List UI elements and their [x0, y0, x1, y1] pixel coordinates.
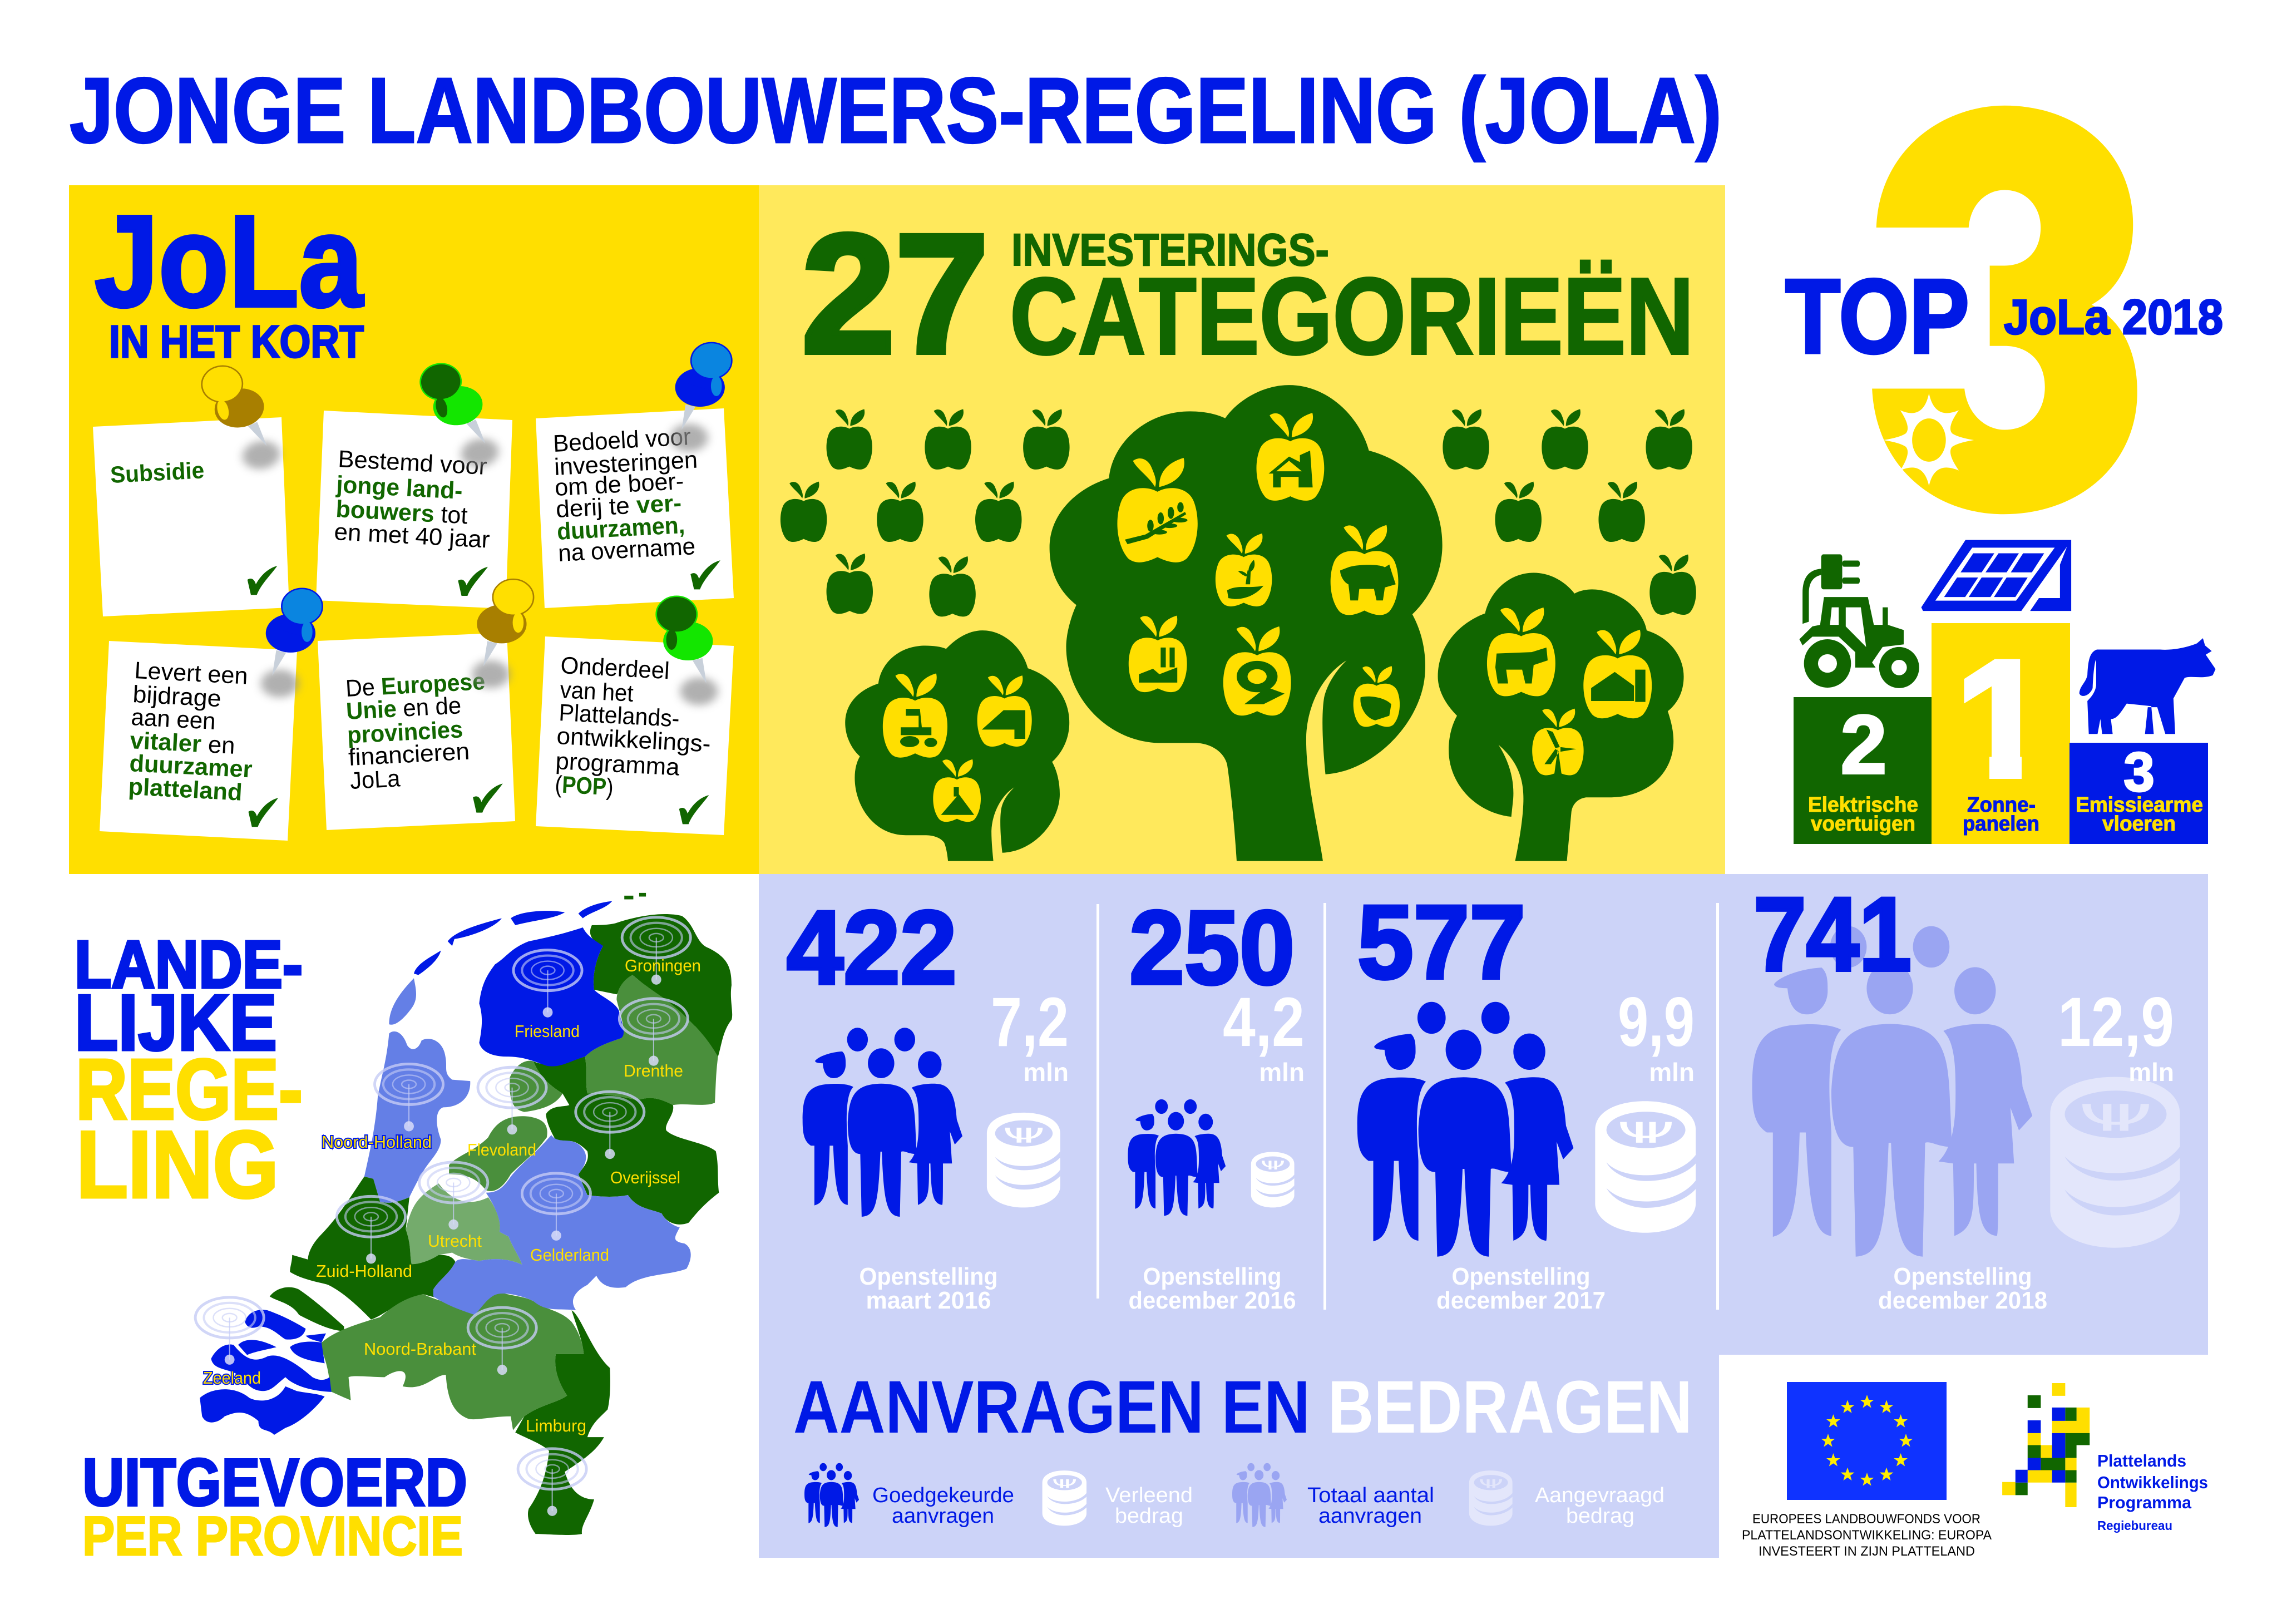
podium third place: 3 — [2123, 741, 2155, 803]
legend: aanvragen — [892, 1504, 994, 1528]
note: bedoeld voor: Bedoeld voor — [552, 423, 692, 457]
podium first place: panelen — [1963, 812, 2039, 836]
tree: right — [1438, 573, 1684, 861]
icon: electric tractor — [1799, 554, 1919, 688]
icon: rose and carrot — [1237, 661, 1277, 692]
apple icons — [900, 451, 1646, 815]
map of the Netherlands — [195, 893, 732, 1535]
panel: investeringscategorieen — [759, 185, 1725, 874]
note: levert een bijdrage: platteland — [127, 773, 243, 806]
note: subsidie: Subsidie — [110, 457, 205, 488]
heading: top: TOP — [1785, 258, 1969, 376]
logo: plattelands ontwikkelings programma — [2002, 1383, 2208, 1533]
note: bedoeld voor — [536, 408, 734, 608]
note: levert een bijdrage — [100, 641, 297, 841]
pins and check marks — [198, 343, 732, 827]
icon: farm with silo — [1591, 670, 1646, 702]
EU caption — [1742, 1512, 1992, 1559]
column: december 2017: december 2017 — [1436, 1287, 1606, 1314]
column: december 2017: 577 — [1357, 883, 1525, 1000]
column: december 2018: Openstelling — [1894, 1263, 2032, 1290]
podium second place: voertuigen — [1811, 812, 1915, 836]
icon: soil — [941, 787, 974, 815]
note: bestemd voor: en met 40 jaar — [333, 519, 491, 554]
province labels: Noord-Holland — [322, 1132, 432, 1152]
legend: bedrag — [1566, 1504, 1634, 1528]
icon: solar — [982, 710, 1025, 739]
pixel figure — [2002, 1383, 2090, 1507]
note: onderdeel POP: programma — [555, 748, 680, 781]
icon: chicken — [1360, 697, 1391, 720]
tree: large — [1050, 385, 1443, 861]
podium third place — [2069, 741, 2208, 844]
legend: Totaal aantal — [1307, 1484, 1434, 1507]
province labels: Drenthe — [624, 1061, 683, 1080]
heading: uitgevoerd per provincie: UITGEVOERD — [82, 1444, 467, 1520]
logo: plattelands ontwikkelings programma: Plattelands — [2097, 1451, 2186, 1470]
column: maart 2016: mln — [1023, 1058, 1069, 1087]
EU caption: INVESTEERT IN ZIJN PLATTELAND — [1759, 1544, 1975, 1559]
note: onderdeel POP — [536, 636, 734, 835]
province markers — [195, 917, 690, 1516]
legend: aanvragen — [1318, 1504, 1422, 1528]
logo: plattelands ontwikkelings programma: Regiebureau — [2097, 1518, 2172, 1533]
province labels: Noord-Brabant — [364, 1339, 476, 1359]
province labels: Zeeland — [203, 1368, 261, 1388]
note: europese unie: financieren — [348, 738, 470, 771]
column: maart 2016: 7,2 — [991, 984, 1069, 1061]
map heading: landelijke regeling: REGE- — [76, 1041, 303, 1137]
note: onderdeel POP: van het — [559, 677, 634, 707]
map heading: landelijke regeling: LANDE- — [75, 926, 303, 1002]
column: december 2018 — [1752, 876, 2180, 1314]
panel: top 3 — [1785, 106, 2223, 844]
province labels: Zuid-Holland — [316, 1261, 412, 1281]
column: december 2016: 250 — [1129, 889, 1295, 1006]
icon: reeds — [1139, 648, 1177, 683]
column: december 2016 — [1128, 889, 1305, 1314]
province labels: Limburg — [526, 1416, 586, 1435]
legend: Goedgekeurde — [872, 1484, 1014, 1507]
big yellow 3 and sun — [1872, 106, 2137, 514]
heading: aanvragen en bedragen: AANVRAGEN EN BEDRAGEN — [793, 1366, 1692, 1449]
podium third place: Emissiearme — [2076, 793, 2203, 817]
yellow apples on trees — [883, 413, 1652, 822]
note: onderdeel POP: (POP) — [554, 771, 614, 801]
icon: wheat — [1125, 512, 1186, 544]
legend — [804, 1463, 1664, 1528]
column: maart 2016: 422 — [787, 889, 957, 1006]
column: december 2018: december 2018 — [1878, 1287, 2047, 1314]
icon: wind turbine — [1544, 729, 1577, 776]
panel: aanvragen en bedragen background — [759, 874, 2208, 1558]
column: december 2017: Openstelling — [1452, 1263, 1590, 1290]
note: bedoeld voor: investeringen — [554, 447, 698, 481]
column: december 2018: mln — [2128, 1058, 2174, 1087]
province labels — [203, 956, 701, 1435]
panel: JoLa in het kort — [69, 185, 759, 874]
province labels: Utrecht — [428, 1231, 482, 1251]
heading: uitgevoerd per provincie: PER PROVINCIE — [82, 1505, 463, 1567]
map heading: landelijke regeling: LIJKE — [75, 979, 277, 1067]
icon: tractor — [901, 709, 931, 735]
icon: solar panel — [1922, 540, 2071, 611]
column: maart 2016 — [787, 889, 1069, 1314]
note: levert een bijdrage: Levert een — [134, 657, 249, 690]
note: bedoeld voor: duurzamen, — [556, 512, 685, 545]
note: subsidie — [93, 417, 289, 616]
column: december 2017: mln — [1649, 1058, 1695, 1087]
icon: barn — [1268, 451, 1313, 487]
province labels: Gelderland — [530, 1245, 609, 1265]
note: europese unie: JoLa — [349, 765, 401, 794]
map heading: landelijke regeling: LING — [76, 1112, 279, 1218]
legend: bedrag — [1115, 1504, 1183, 1528]
icon: cow — [1495, 648, 1548, 683]
column: december 2017: 9,9 — [1618, 984, 1695, 1061]
divider — [1716, 903, 1719, 1310]
legend icons — [804, 1463, 1513, 1527]
podium first place: 1 — [1955, 625, 2048, 812]
column: december 2018: 741 — [1754, 876, 1912, 993]
subheading: in het kort: IN HET KORT — [109, 317, 364, 367]
column: maart 2016: Openstelling — [859, 1263, 998, 1290]
column: december 2017 — [1357, 883, 1696, 1314]
column: december 2016: december 2016 — [1128, 1287, 1296, 1314]
icon: seedling in hand — [1227, 560, 1263, 599]
divider — [1096, 904, 1099, 1299]
note: bestemd voor: bouwers tot — [335, 496, 468, 529]
note: bestemd voor: Bestemd voor — [337, 446, 488, 480]
legend: Aangevraagd — [1535, 1484, 1664, 1507]
note: onderdeel POP: Onderdeel — [560, 652, 670, 684]
column: maart 2016: maart 2016 — [866, 1287, 991, 1314]
heading: uitgevoerd per provincie — [82, 1444, 467, 1567]
small apples — [781, 409, 1696, 616]
note: onderdeel POP: Plattelands- — [558, 699, 680, 732]
legend: Verleend — [1105, 1484, 1193, 1507]
note: onderdeel POP: ontwikkelings- — [556, 723, 712, 757]
note: europese unie: provincies — [347, 716, 463, 749]
note: bestemd voor: jonge land- — [335, 471, 463, 505]
podium second place: 2 — [1840, 698, 1887, 791]
podium first place — [1932, 623, 2070, 844]
map heading: landelijke regeling — [75, 926, 303, 1218]
note: levert een bijdrage: duurzamer — [129, 750, 253, 783]
heading: categorieen: CATEGORIEËN — [1010, 255, 1694, 377]
divider — [1323, 903, 1326, 1310]
tree: left — [845, 630, 1069, 861]
title: JONGE LANDBOUWERS-REGELING (JOLA) — [70, 59, 1722, 162]
note: levert een bijdrage: aan een — [130, 704, 216, 735]
heading: investerings: INVESTERINGS- — [1011, 225, 1329, 275]
column: december 2016: Openstelling — [1143, 1263, 1282, 1290]
logo: EU flag — [1787, 1382, 1947, 1500]
column: december 2016: 4,2 — [1223, 984, 1305, 1061]
column: december 2016: mln — [1259, 1058, 1305, 1087]
province labels: Groningen — [625, 956, 701, 975]
podium second place: Elektrische — [1808, 793, 1918, 817]
big number 27: 27 — [802, 200, 989, 388]
province labels: Friesland — [515, 1021, 580, 1041]
podium first place: Zonne- — [1967, 793, 2036, 817]
EU caption: PLATTELANDSONTWIKKELING: EUROPA — [1742, 1528, 1992, 1543]
heading: JoLa: JoLa — [95, 188, 364, 334]
note: levert een bijdrage: vitaler en — [129, 727, 236, 759]
icon: pig — [1340, 565, 1396, 600]
podium third place: vloeren — [2102, 812, 2176, 836]
trees and apples — [781, 385, 1696, 861]
note: europese unie: De Europese — [345, 668, 486, 702]
logo: plattelands ontwikkelings programma: Ontwikkelings — [2097, 1473, 2208, 1492]
EU caption: EUROPEES LANDBOUWFONDS VOOR — [1752, 1512, 1980, 1527]
podium second place — [1794, 697, 1932, 844]
province labels: Flevoland — [467, 1140, 536, 1159]
column: december 2018: 12,9 — [2058, 984, 2174, 1061]
note: europese unie: Unie en de — [345, 692, 462, 725]
note: bedoeld voor: derij te ver- — [555, 490, 682, 523]
note: bestemd voor — [316, 411, 512, 609]
province labels: Overijssel — [610, 1168, 680, 1187]
icon: cow — [2080, 638, 2216, 734]
note: bedoeld voor: om de boer- — [554, 468, 684, 501]
logo: plattelands ontwikkelings programma: Programma — [2097, 1493, 2192, 1512]
note: levert een bijdrage: bijdrage — [132, 681, 222, 712]
note: europese unie — [318, 633, 515, 830]
provinces — [195, 893, 732, 1535]
note: bedoeld voor: na overname — [557, 533, 696, 567]
heading: jola 2018: JoLa 2018 — [2004, 289, 2223, 344]
